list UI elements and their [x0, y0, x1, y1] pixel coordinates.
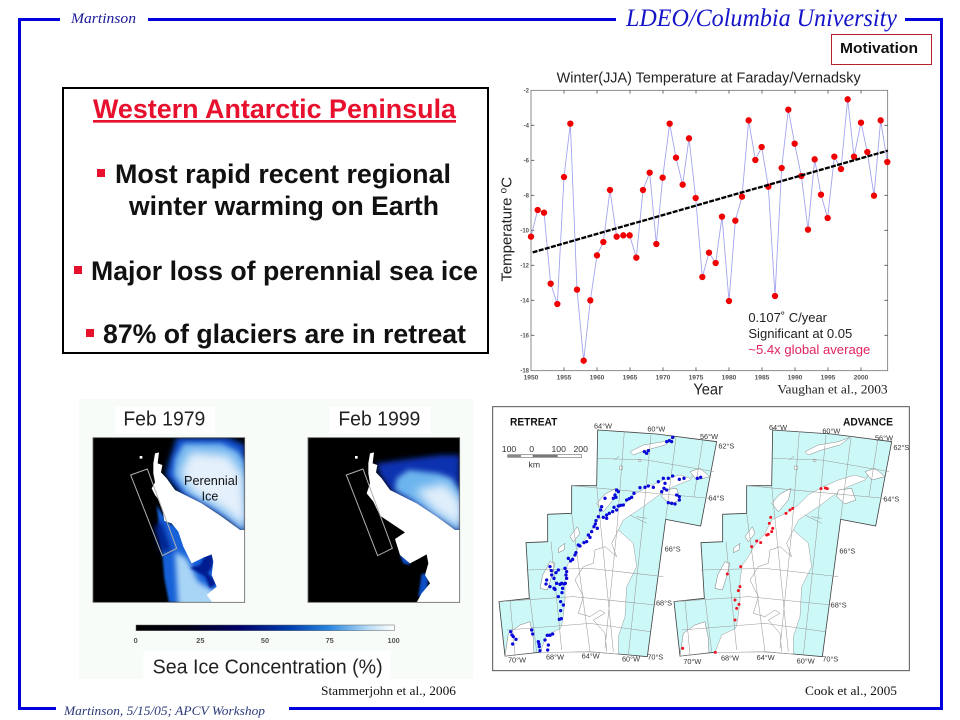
scale bar: 200: [573, 444, 588, 454]
advance map graticule labels: 64°S: [883, 495, 899, 504]
map: Feb 1979: [93, 438, 247, 608]
advance map graticule labels: 70°S: [822, 655, 838, 664]
color bar title: Sea Ice Concentration (%): [153, 655, 383, 678]
x axis tick labels: 1980: [722, 374, 737, 381]
source: Stammerjohn: Stammerjohn et al., 2006: [321, 683, 457, 698]
source: Vaughan: Vaughan et al., 2003: [777, 382, 888, 397]
advance map graticule labels: 56°W: [875, 434, 893, 443]
trend annotation: 0.107˚ C/year: [748, 311, 827, 325]
retreat map graticule labels: 70°S: [647, 652, 663, 661]
trend line: [533, 151, 888, 252]
retreat map graticule labels: 60°W: [647, 425, 665, 434]
y axis title: C: [499, 177, 516, 188]
advance map graticule labels: 68°S: [831, 601, 847, 610]
y axis tick labels: -2: [524, 88, 530, 94]
section tag: Motivation: [832, 34, 932, 64]
scale bar: 0: [529, 444, 534, 454]
temperature data points: [531, 99, 887, 361]
scale bar: [502, 444, 588, 469]
advance map graticule labels: 60°W: [822, 426, 840, 435]
bullet: most rapid warming: [97, 159, 451, 221]
study-region box 1979: [131, 469, 177, 556]
chart: winter temperature at Faraday/Vernadsky: [499, 70, 888, 398]
advance map graticule labels: 64°W: [769, 423, 787, 432]
x axis tick labels: 1960: [590, 374, 605, 381]
trend annotation: ~5.4x global average: [748, 343, 870, 357]
y axis tick labels: -4: [524, 123, 530, 129]
y axis tick labels: -18: [520, 369, 530, 375]
retreat map graticule labels: 68°S: [656, 599, 672, 608]
label: RETREAT: RETREAT: [510, 416, 558, 428]
map: Feb 1999: [308, 438, 462, 602]
x axis title: Year: [693, 381, 723, 398]
x axis tick labels: 1970: [656, 374, 671, 381]
x axis tick labels: 1975: [689, 374, 704, 381]
y axis tick labels: -16: [520, 333, 530, 339]
retreat map graticule labels: 60°W: [622, 655, 640, 664]
chart title: Winter(JJA) Temperature at Faraday/Vernadsky: [557, 70, 861, 87]
color bar tick labels: [134, 636, 400, 645]
map title: Feb 1999: [330, 407, 430, 433]
bullet: glaciers in retreat: 87% of glaciers are in retreat: [103, 319, 466, 349]
y axis tick labels: -14: [520, 298, 530, 304]
color bar tick labels: 25: [196, 636, 204, 645]
temperature series line: [531, 99, 887, 361]
advance map graticule labels: 60°W: [797, 656, 815, 665]
map title: Feb 1979: [115, 407, 215, 433]
color bar: [134, 625, 400, 645]
bullet: most rapid warming: winter warming on Earth: [128, 191, 439, 221]
color bar tick labels: 50: [261, 636, 269, 645]
trend annotation: [748, 311, 870, 357]
map title: Feb 1999: Feb 1999: [338, 409, 420, 431]
y axis tick labels: -10: [520, 228, 530, 234]
panel: key points text box: [63, 88, 488, 353]
advance map graticule labels: 62°S: [893, 443, 909, 452]
x axis tick labels: [524, 374, 869, 381]
y axis tick labels: -6: [524, 158, 530, 164]
retreat map graticule labels: 56°W: [700, 432, 718, 441]
label: Perennial Ice: [184, 473, 238, 503]
label: Perennial Ice: Ice: [202, 488, 218, 503]
advance map graticule labels: 70°W: [683, 657, 701, 666]
x axis tick labels: 1955: [557, 374, 572, 381]
y axis title: Temperature: [499, 198, 516, 282]
panel background: [79, 399, 473, 679]
header: institution: LDEO/Columbia University: [625, 5, 898, 32]
map frame: [493, 407, 909, 671]
retreat map graticule labels: 64°W: [582, 651, 600, 660]
retreat map graticule labels: 68°W: [546, 652, 564, 661]
retreat map graticule labels: 64°S: [708, 494, 724, 503]
footer: presenter and date: Martinson, 5/15/05; APCV Workshop: [63, 703, 266, 718]
advance map graticule labels: 64°W: [757, 653, 775, 662]
x axis tick labels: 1965: [623, 374, 638, 381]
y axis tick labels: -8: [524, 193, 530, 199]
color bar tick labels: 0: [134, 636, 138, 645]
bullet: sea ice loss: Major loss of perennial sea ice: [91, 256, 478, 286]
map: retreat: [499, 416, 734, 665]
advance map graticule labels: [683, 423, 909, 666]
map: advance: [674, 416, 909, 666]
x axis tick labels: 2000: [854, 374, 869, 381]
header: presenter name: Martinson: [70, 11, 136, 27]
study-region box 1999: [346, 469, 392, 556]
y axis tick labels: -12: [520, 263, 530, 269]
section tag: Motivation: Motivation: [840, 40, 918, 57]
x axis tick labels: 1950: [524, 374, 539, 381]
y axis tick labels: [520, 88, 530, 375]
source: Cook: Cook et al., 2005: [805, 683, 897, 698]
retreat map graticule labels: 64°W: [594, 421, 612, 430]
retreat map graticule labels: 70°W: [508, 656, 526, 665]
color bar tick labels: 100: [388, 636, 400, 645]
trend annotation: Significant at 0.05: [748, 327, 852, 341]
scale bar: 100: [551, 444, 566, 454]
panel: sea ice concentration maps: [92, 410, 460, 678]
label: Perennial Ice: Perennial: [184, 473, 238, 488]
plot axes: [531, 90, 888, 371]
x axis tick labels: 1990: [788, 374, 803, 381]
map title: Feb 1979: Feb 1979: [123, 409, 205, 431]
retreat map graticule labels: 66°S: [665, 545, 681, 554]
heading: Western Antarctic Peninsula: Western Antarctic Peninsula: [93, 94, 456, 124]
retreat glacier dots: [511, 437, 701, 651]
color bar tick labels: 75: [326, 636, 334, 645]
retreat map graticule labels: [508, 421, 734, 665]
bullet: most rapid warming: Most rapid recent regional: [115, 159, 451, 189]
advance map graticule labels: 68°W: [721, 654, 739, 663]
label: ADVANCE: ADVANCE: [843, 416, 893, 428]
retreat map graticule labels: 62°S: [718, 441, 734, 450]
panel: glacier retreat and advance maps: [493, 407, 909, 671]
advance map graticule labels: 66°S: [839, 546, 855, 555]
y axis title: o: [499, 187, 510, 193]
scale bar: km: [529, 459, 540, 469]
x axis tick labels: 1995: [821, 374, 836, 381]
x axis tick labels: 1985: [755, 374, 770, 381]
advance glacier dots: [683, 488, 827, 652]
scale bar: 100: [502, 444, 516, 454]
